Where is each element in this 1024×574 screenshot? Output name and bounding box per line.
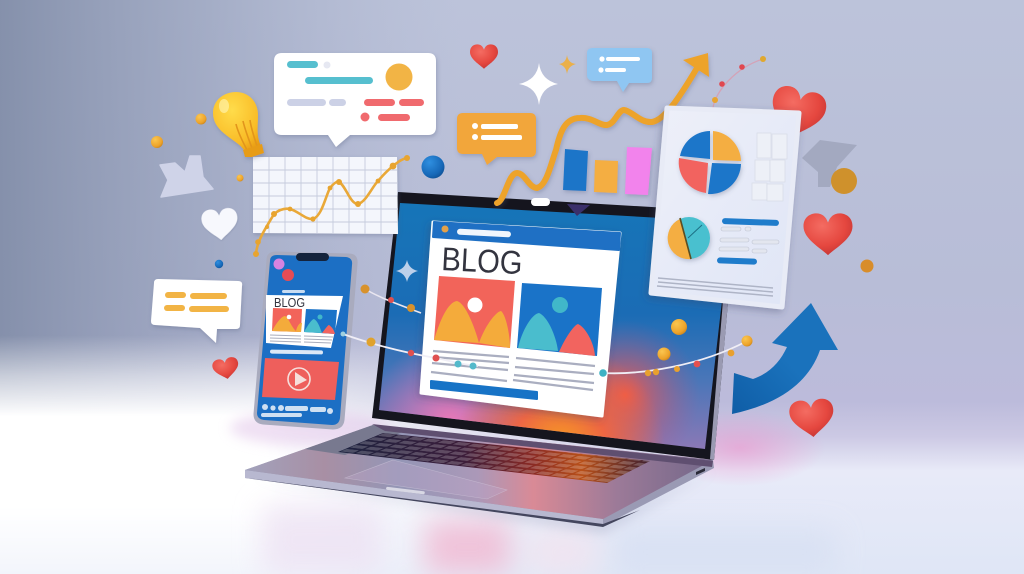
text lines — [431, 351, 595, 390]
laptop — [245, 192, 736, 532]
laptop screen — [379, 203, 731, 449]
laptop lid — [372, 192, 736, 460]
phone blog card — [266, 290, 343, 348]
big heart behind panel — [765, 83, 829, 143]
heart: left red — [211, 356, 241, 381]
light blue speech bubble — [587, 48, 652, 92]
trend line — [253, 155, 410, 257]
phone screen — [257, 255, 352, 425]
blue curved arrow — [732, 303, 838, 414]
BLOG heading: BLOG — [441, 240, 523, 281]
pie chart large — [679, 131, 741, 194]
floor reflection — [262, 505, 835, 574]
window title bar — [433, 222, 620, 250]
paper plane shape — [160, 156, 213, 197]
phone video card — [262, 358, 339, 400]
heart: top — [470, 44, 498, 69]
phone notch — [296, 253, 329, 261]
keyboard — [338, 433, 650, 483]
connector strings — [340, 284, 752, 377]
speech bubble: top — [274, 53, 436, 147]
report panel — [651, 108, 799, 307]
gray arrow — [802, 140, 857, 187]
floating dots — [151, 114, 874, 272]
trackpad — [345, 460, 507, 499]
blue bars and text lines — [717, 218, 779, 265]
rising arrow — [497, 53, 709, 203]
laptop base — [245, 424, 714, 527]
laptop shadow — [250, 470, 715, 532]
ports — [696, 468, 705, 475]
red image card — [434, 276, 515, 348]
grid chart — [253, 155, 410, 257]
sparkle on screen — [396, 260, 418, 282]
hearts — [201, 44, 853, 439]
heart: white — [201, 207, 239, 242]
notch triangle — [567, 204, 590, 216]
footer lines — [657, 278, 773, 296]
orange speech bubble — [457, 113, 536, 165]
phone footer — [261, 404, 333, 417]
notch — [386, 487, 425, 494]
sparkle: orange — [559, 55, 576, 74]
brown circle — [831, 168, 857, 194]
heart: right — [804, 213, 852, 255]
speech bubble: left — [151, 279, 242, 343]
hinge — [372, 424, 713, 467]
bar chart — [563, 147, 652, 195]
webcam pill — [531, 198, 550, 206]
grid table — [752, 133, 787, 201]
pie chart small — [668, 217, 710, 259]
phone dots — [274, 258, 284, 270]
blue image card — [517, 283, 602, 356]
phone — [255, 253, 356, 428]
phone blog heading: BLOG — [274, 295, 305, 310]
blog window — [421, 222, 620, 416]
dotted arc — [712, 56, 766, 108]
light bulb — [213, 92, 264, 157]
blue link bar — [431, 381, 537, 399]
heart: lower right — [788, 398, 835, 439]
sparkle: white — [519, 63, 558, 105]
